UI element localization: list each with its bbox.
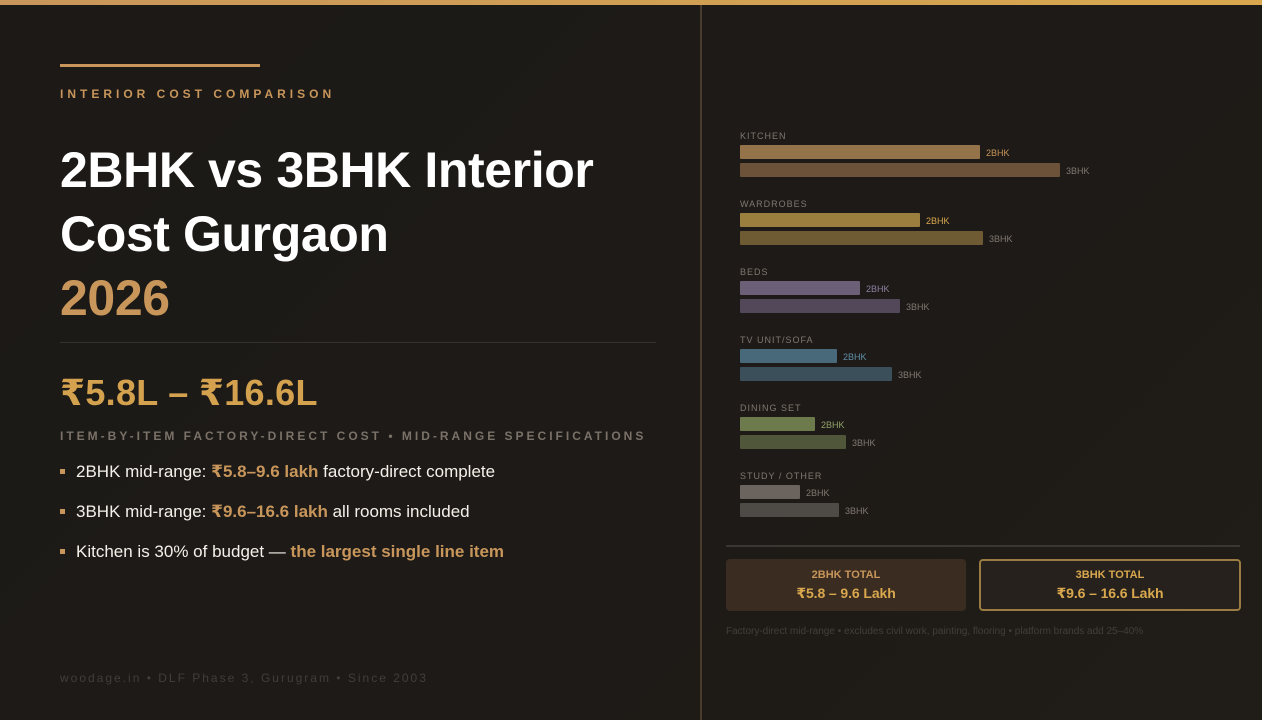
tag: dining 2BHK: 2BHK bbox=[821, 420, 845, 430]
tag: wardrobes 2BHK: 2BHK bbox=[926, 216, 950, 226]
totals divider bbox=[726, 545, 1240, 547]
bar: beds 3BHK bbox=[740, 299, 900, 313]
horizontal divider bbox=[60, 342, 656, 343]
bullet: 3BHK: 3BHK mid-range: ₹9.6–16.6 lakh all rooms included bbox=[76, 502, 470, 521]
title bbox=[60, 142, 594, 326]
tag: tv 2BHK: 2BHK bbox=[843, 352, 867, 362]
bar: study 2BHK bbox=[740, 485, 800, 499]
title: 2BHK vs 3BHK Interior bbox=[60, 142, 593, 198]
tag: kitchen 2BHK: 2BHK bbox=[986, 148, 1010, 158]
bullet: 2BHK: 2BHK mid-range: ₹5.8–9.6 lakh factory-direct complete bbox=[76, 462, 495, 481]
bullet: kitchen: Kitchen is 30% of budget — the largest single line item bbox=[76, 542, 504, 561]
label: dining set: DINING SET bbox=[740, 403, 802, 413]
card: 3BHK total bbox=[979, 559, 1241, 611]
card: 2BHK total bbox=[726, 559, 966, 611]
tag: wardrobes 3BHK: 3BHK bbox=[989, 234, 1013, 244]
tag: dining 3BHK: 3BHK bbox=[852, 438, 876, 448]
panel: left intro bbox=[60, 64, 656, 685]
bar: dining 2BHK bbox=[740, 417, 815, 431]
label: wardrobes: WARDROBES bbox=[740, 199, 808, 209]
bar: tv 3BHK bbox=[740, 367, 892, 381]
price range: ₹5.8L – ₹16.6L bbox=[60, 372, 318, 413]
label: tv unit/sofa: TV UNIT/SOFA bbox=[740, 335, 814, 345]
label: beds: BEDS bbox=[740, 267, 769, 277]
accent rule bbox=[60, 64, 260, 67]
bar: wardrobes 2BHK bbox=[740, 213, 920, 227]
vertical panel divider bbox=[700, 5, 702, 720]
tag: study 3BHK: 3BHK bbox=[845, 506, 869, 516]
label: study/other: STUDY / OTHER bbox=[740, 471, 822, 481]
tag: tv 3BHK: 3BHK bbox=[898, 370, 922, 380]
footer: woodage.in • DLF Phase 3, Gurugram • Since 2003 bbox=[60, 671, 428, 685]
tag: kitchen 3BHK: 3BHK bbox=[1066, 166, 1090, 176]
bar: kitchen 3BHK bbox=[740, 163, 1060, 177]
bar: tv 2BHK bbox=[740, 349, 837, 363]
card value: ₹5.8 – 9.6 Lakh bbox=[796, 585, 896, 601]
tag: study 2BHK: 2BHK bbox=[806, 488, 830, 498]
bar chart: cost by item bbox=[740, 131, 1090, 517]
tag: beds 2BHK: 2BHK bbox=[866, 284, 890, 294]
bar: beds 2BHK bbox=[740, 281, 860, 295]
bar: kitchen 2BHK bbox=[740, 145, 980, 159]
card label: 3BHK TOTAL bbox=[1076, 569, 1144, 581]
bar: wardrobes 3BHK bbox=[740, 231, 983, 245]
card value: ₹9.6 – 16.6 Lakh bbox=[1056, 585, 1163, 601]
top accent bar bbox=[0, 0, 1262, 5]
bar: dining 3BHK bbox=[740, 435, 846, 449]
title: Cost Gurgaon bbox=[60, 206, 389, 262]
subtitle: ITEM-BY-ITEM FACTORY-DIRECT COST • MID-RANGE SPECIFICATIONS bbox=[60, 429, 646, 443]
title: 2026 bbox=[60, 270, 170, 326]
eyebrow label: INTERIOR COST COMPARISON bbox=[60, 87, 335, 101]
card label: 2BHK TOTAL bbox=[812, 569, 880, 581]
label: kitchen: KITCHEN bbox=[740, 131, 787, 141]
footnote: Factory-direct mid-range • excludes civil work, painting, flooring • platform brands add 25–40% bbox=[726, 626, 1143, 637]
bar: study 3BHK bbox=[740, 503, 839, 517]
tag: beds 3BHK: 3BHK bbox=[906, 302, 930, 312]
